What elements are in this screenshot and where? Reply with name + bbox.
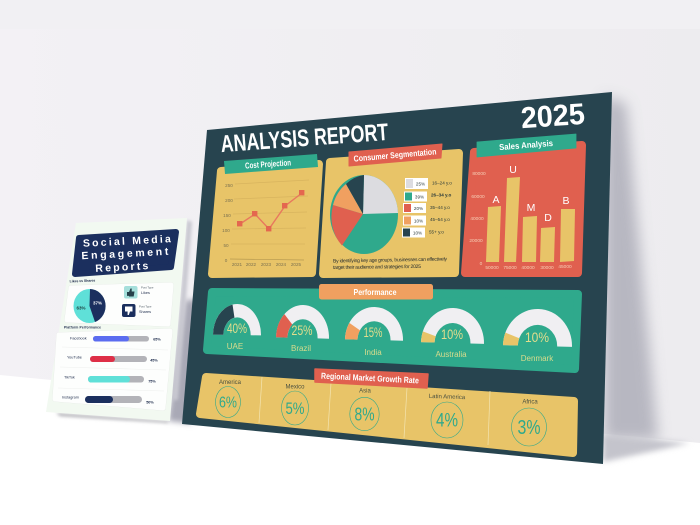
bar chart: sales: M [527,202,535,214]
bar: YouTube: 45% [150,358,158,362]
line chart: cost projection: 100 [222,228,230,233]
like and share labels: Shares [139,310,151,314]
gauge: UAE: UAE [227,342,243,351]
bar: TikTok: TikTok [64,376,75,380]
panel: regional market growth rate [200,369,574,453]
line chart: cost projection: 50 [223,243,229,248]
bar: TikTok [64,376,156,384]
platform performance heading: Platform Performance [64,326,101,330]
gauge: India: India [364,348,382,357]
line chart: cost projection: 0 [225,258,228,263]
line chart: cost projection: 2022 [246,262,257,267]
bar chart: sales [469,164,575,271]
panel: performance [207,284,578,369]
legend: age groups: 20% [414,206,423,211]
segmentation note: target their audience and strategies for 2025 [333,264,421,271]
like and share labels: Post Type [139,304,152,308]
gauge: Australia: Australia [435,350,467,359]
pie: likes vs shares: 63% [76,306,86,310]
bar chart: sales: 80000 [472,171,486,177]
line chart: cost projection: 200 [225,198,233,203]
card: likes vs shares [67,285,171,324]
bar chart: sales: D [544,212,552,224]
bar chart: sales: B [562,195,570,207]
bar: Facebook: Facebook [70,336,87,340]
gauge: Brazil: Brazil [291,344,311,353]
legend: age groups: 35–44 y.o [430,205,450,210]
heading: regional market growth rate: Regional Market Growth Rate [321,371,419,385]
stat: Mexico [282,384,308,425]
legend: age groups [402,178,452,238]
stat: Africa: Africa [522,400,538,406]
legend: age groups: 10% [414,218,423,224]
gauge: Denmark: 10% [525,330,549,345]
likes vs shares heading: Likes vs Shares [70,279,95,283]
stat: Africa: 3% [518,417,541,439]
poster title banner: Social Media [83,233,171,250]
stat: Asia [350,388,379,431]
gauge: Australia [421,307,485,359]
stat: America: America [219,380,242,386]
heading: cost projection: Cost Projection [245,157,291,171]
bar chart: sales: 45000 [558,264,572,270]
legend: age groups: 16–24 y.o [432,180,452,186]
panel: sales analysis [465,134,582,273]
like and share labels: Post Type [141,286,154,290]
stat: Mexico: 5% [286,399,304,418]
stat: Latin America [429,394,466,438]
stat: America [216,380,242,418]
gauge: Brazil: 25% [292,323,312,338]
heading: performance [319,284,433,300]
icon: thumbs up [124,286,138,298]
stat: Latin America: Latin America [429,394,466,401]
stat: Asia: 8% [354,404,374,424]
poster shadow [56,220,200,424]
poster title banner [75,232,176,275]
poster: social media engagement reports [46,218,187,421]
legend: age groups: 45–54 y.o [430,217,450,222]
bar chart: sales: 40000 [521,265,535,271]
legend: age groups: 26–34 y.o [431,192,452,198]
pie: likes vs shares: 37% [93,300,102,306]
year: 2025 [520,98,586,135]
line chart: cost projection: 2021 [232,262,243,267]
bar chart: sales: 75000 [503,265,517,271]
legend: age groups: 25% [416,182,425,186]
board: analysis report [182,92,612,464]
bar: Facebook [70,336,161,342]
board shadow [603,96,690,462]
legend: age groups: 10% [413,230,422,236]
bar: Instagram: Instagram [62,396,79,400]
heading: sales analysis: Sales Analysis [499,138,554,152]
stat: Africa [512,400,546,446]
bar chart: sales: A [492,194,500,206]
segmentation note: By identifying key age groups, businesses can effectively [333,257,448,264]
gauge: Australia: 10% [441,327,463,342]
bar: Instagram [62,396,154,404]
gauge: UAE: 40% [227,321,247,336]
stat: Latin America: 4% [436,410,458,432]
pie chart: age groups [330,175,398,254]
line chart: cost projection: 250 [225,183,233,188]
bar chart: sales: 50000 [485,265,499,271]
gauge: Denmark [503,308,573,363]
bar chart: sales: 40000 [470,216,484,222]
bar chart: sales: 20000 [469,238,483,244]
like and share labels: Likes [141,291,150,295]
line chart: cost projection: 2023 [261,262,272,267]
icon: thumbs down [122,304,136,317]
bar: Facebook: 65% [153,338,161,342]
pie: likes vs shares [74,289,106,323]
like and share labels [139,286,154,314]
gauge: UAE [213,304,262,351]
bar chart: sales: 60000 [471,194,485,200]
gauge: Denmark: Denmark [521,354,554,363]
heading: performance: Performance [354,287,397,297]
poster title banner: Engagement [81,246,169,262]
bar chart: sales: 0 [480,261,483,267]
segmentation note [333,257,448,271]
gauge: Brazil [276,304,330,353]
panel: cost projection [212,154,319,274]
bar chart: sales: 30000 [540,265,554,271]
stat: America: 6% [219,394,237,412]
bar: YouTube: YouTube [67,356,82,360]
panel: consumer segmentation [323,144,459,274]
legend: age groups: 39% [415,194,424,200]
bar: YouTube [67,356,158,362]
bar: Instagram: 50% [146,400,154,404]
heading: consumer segmentation: Consumer Segmentation [353,146,437,164]
line chart: cost projection: 2024 [276,262,287,267]
title: ANALYSIS REPORT [220,119,389,158]
gauge: India: 15% [364,325,382,340]
gauge: India [345,306,404,357]
legend: age groups: 55+ y.o [429,230,444,234]
stat: Mexico: Mexico [285,384,305,390]
stat: Asia: Asia [359,388,371,394]
line chart: cost projection [222,180,309,267]
card: platform performance [55,331,170,408]
bar chart: sales: U [509,164,517,176]
line chart: cost projection: 2025 [291,262,302,267]
bar: TikTok: 75% [148,380,156,384]
poster title banner: Reports [95,260,149,275]
line chart: cost projection: 150 [223,213,231,218]
